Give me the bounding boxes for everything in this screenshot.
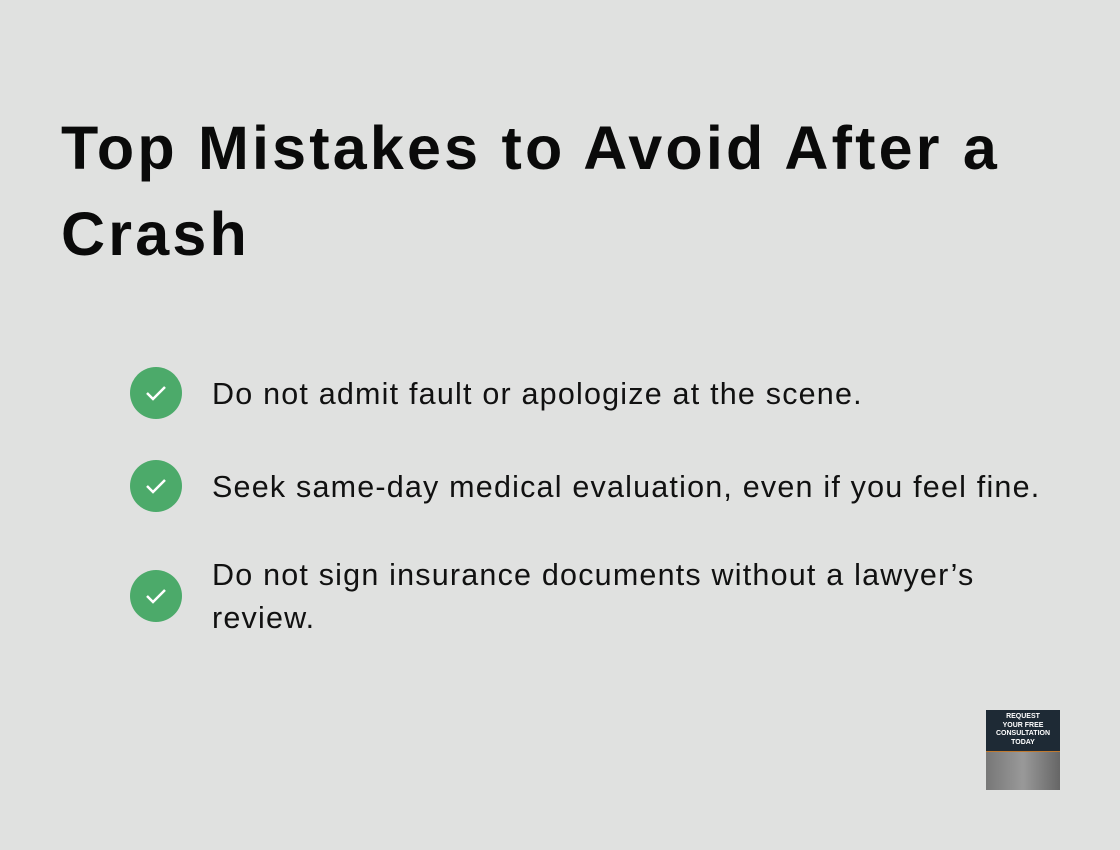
title: Top Mistakes to Avoid After a Crash [61,114,1000,268]
badge text: REQUEST [1006,713,1040,720]
text 1: Do not admit fault or apologize at the scene. [212,377,863,411]
logo badge [986,710,1060,790]
text 2: Seek same-day medical evaluation, even if you feel fine. [212,470,1040,504]
icon: check 1 [130,367,182,419]
item 2 [130,460,1040,512]
badge text: TODAY [1011,738,1035,746]
item 3 [130,558,974,635]
text 3: Do not sign insurance documents without a lawyer’s review. [212,558,974,635]
badge photo [986,752,1060,790]
item 1 [130,367,863,419]
badge text: YOUR FREE [1003,722,1043,728]
badge text [986,710,1060,752]
icon: check 2 [130,460,182,512]
badge text: CONSULTATION [996,730,1050,737]
icon: check 3 [130,570,182,622]
